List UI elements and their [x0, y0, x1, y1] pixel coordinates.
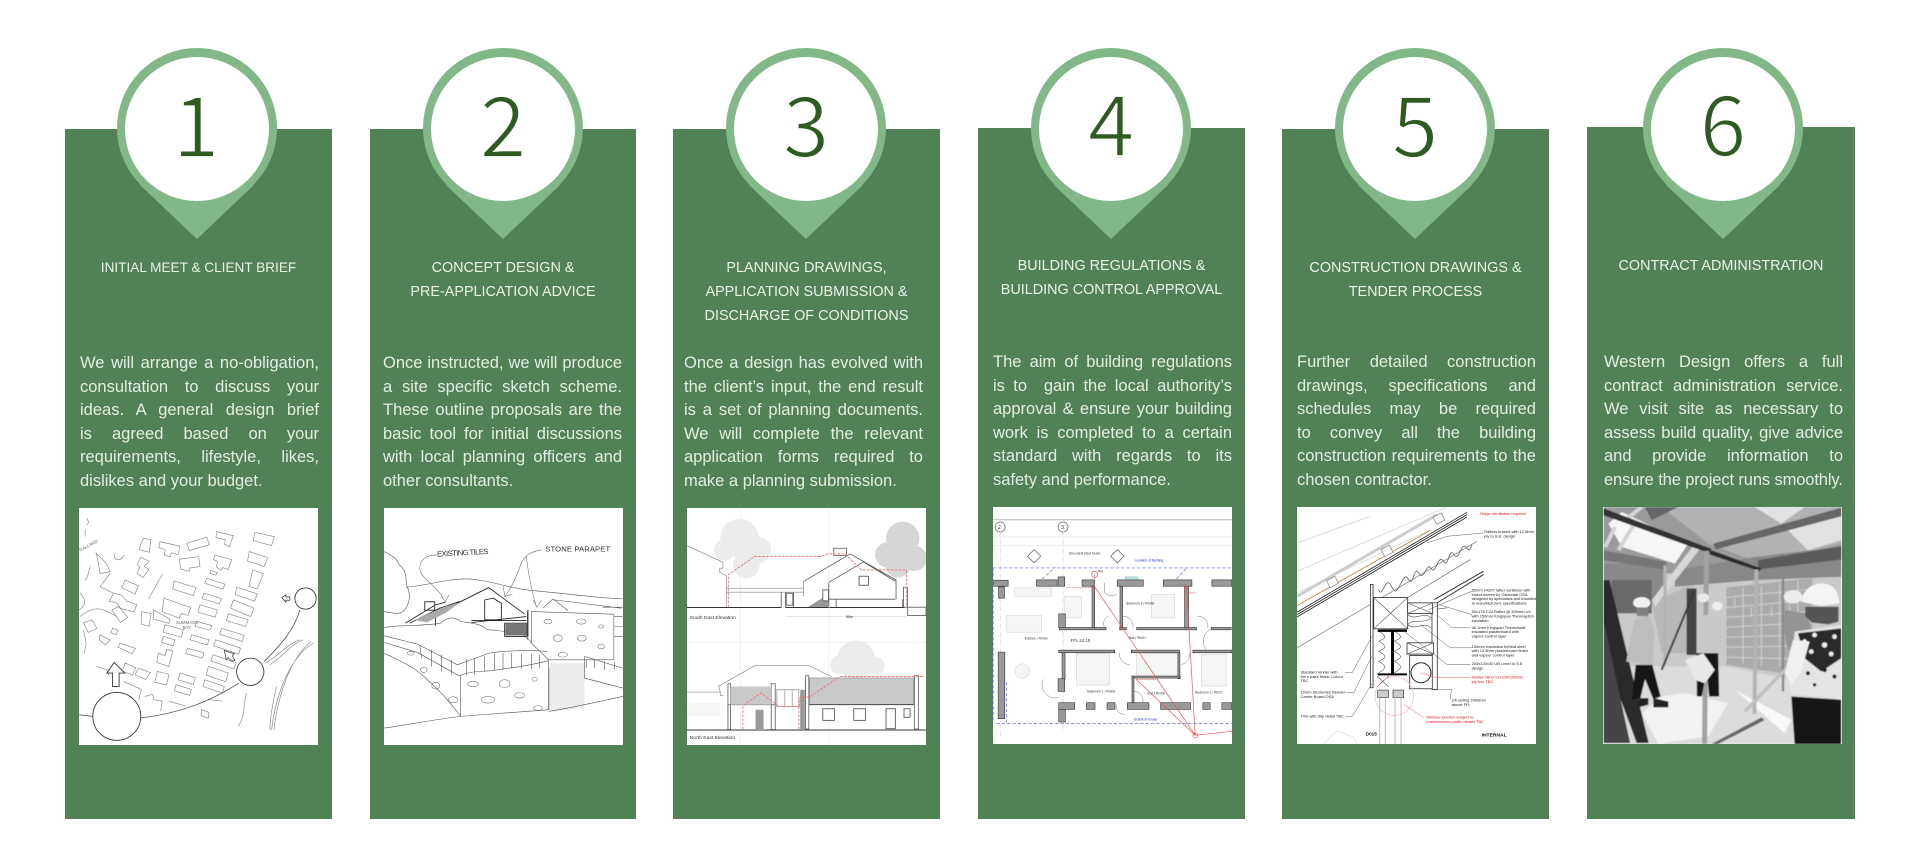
heading: CONTRACT ADMINISTRATION: [1619, 258, 1823, 274]
pin with number 6: [1643, 48, 1803, 239]
image: construction detail: insulated plasterboard with: [1472, 629, 1519, 634]
body text: is agreed based on your: [80, 424, 319, 442]
image: construction detail: design: [1472, 665, 1483, 670]
body text: with local planning officers and: [383, 448, 622, 466]
body text: drawings, specifications and: [1297, 376, 1536, 394]
image: construction detail: insect screen by Glidevale OSA: [1472, 592, 1528, 597]
body text: The aim of building regulations: [993, 353, 1232, 371]
image: planning elevations: 58m: [846, 615, 853, 619]
panel 4: building regulations: [978, 48, 1245, 819]
body text: a site specific sketch scheme.: [383, 378, 622, 396]
heading: CONSTRUCTION DRAWINGS &: [1309, 260, 1522, 276]
image: floor plan: 2: [998, 525, 1001, 531]
image: construction detail: Carrier Board OSA: [1300, 694, 1334, 699]
body text: Once a design has evolved with: [684, 354, 923, 372]
pin with number 2: 2: [480, 61, 526, 182]
body text: make a planning submission.: [684, 472, 897, 490]
person left: [1626, 615, 1654, 665]
image: construction detail: s/b ceiling 2400mm: [1452, 698, 1487, 703]
body text: [684, 354, 923, 490]
image: construction detail: with 150mm Kingspan Thermapitch: [1472, 614, 1534, 619]
image: planning elevations: South East Elevation: [690, 615, 736, 621]
image: construction detail: [1297, 507, 1536, 744]
image: site sketch plan: BAY: [183, 625, 191, 630]
image: floor plan: Location of flashing: [1135, 558, 1163, 562]
image: construction detail: D015: [1366, 732, 1377, 737]
body text: standard with regards to its: [993, 447, 1232, 465]
body text: requirements, lifestyle, likes,: [80, 448, 319, 466]
pin with number 2: [423, 48, 583, 239]
body text: approval & ensure your building: [993, 400, 1232, 418]
heading: [705, 260, 908, 324]
image: floor plan: Rm: [1098, 570, 1103, 574]
heading: TENDER PROCESS: [1349, 284, 1482, 300]
image: construction detail: ply to S.E. design: [1484, 534, 1515, 539]
image: construction detail: Hidden blind 12x100x150mm: [1472, 674, 1524, 679]
image: concept sketch: [384, 508, 623, 745]
image: construction detail: designed by specialists and installed: [1472, 596, 1536, 601]
image: floor plan: Ens / Rm08: [1147, 691, 1165, 695]
body text: and provide information to: [1604, 447, 1843, 465]
image: construction detail: 203x133x30 UB Lintel to S.E: [1472, 661, 1523, 666]
pin with number 4: 4: [1088, 60, 1134, 181]
pin with number 5: [1335, 48, 1495, 239]
image: floor plan: Bedroom 4 / Rm08: [1126, 602, 1154, 606]
image: floor plan: Bedroom 2 / Rm07: [1195, 690, 1223, 694]
body text: construction requirements to the: [1297, 447, 1536, 465]
heading: [1309, 260, 1522, 300]
body text: chosen contractor.: [1297, 470, 1432, 488]
body text: Further detailed construction: [1297, 353, 1536, 371]
body text: the client’s input, the end result: [684, 378, 923, 396]
body text: other consultants.: [383, 472, 513, 490]
panel 3: planning drawings: [673, 48, 940, 819]
heading: APPLICATION SUBMISSION &: [705, 284, 908, 300]
body text: assess build quality, give advice: [1604, 424, 1843, 442]
heading: BUILDING REGULATIONS &: [1018, 258, 1205, 274]
body text: Western Design offers a full: [1604, 353, 1843, 371]
pin with number 4: [1031, 48, 1191, 239]
body text: These outline proposals are the: [383, 401, 622, 419]
person right back: [1784, 610, 1811, 650]
image: construction detail: Standard render with: [1300, 669, 1337, 674]
body text: [993, 353, 1232, 488]
image: floor plan: 3: [1061, 525, 1064, 531]
image: floor plan: Kitchen / Rm03: [1025, 636, 1048, 640]
body text: [80, 354, 319, 490]
heading: PLANNING DRAWINGS,: [726, 260, 887, 276]
body text: ideas. A general design brief: [80, 401, 319, 419]
heading: DISCHARGE OF CONDITIONS: [705, 308, 908, 324]
image: floor plan: [993, 507, 1232, 744]
body text: [1604, 353, 1843, 488]
image: construction detail: above FFL: [1452, 702, 1471, 707]
panel 2: concept design: [370, 48, 636, 819]
image: construction detail: to manufacturers specifications: [1472, 601, 1527, 606]
heading: PRE-APPLICATION ADVICE: [410, 284, 596, 300]
body text: contract administration service.: [1604, 376, 1843, 394]
body text: work is completed to a certain: [993, 424, 1232, 442]
person centre: [1698, 612, 1721, 653]
image: construction detail: 50mm x420? rafter ventilator with: [1472, 588, 1530, 593]
image: planning elevations: [687, 508, 926, 745]
person right front: [1791, 696, 1841, 744]
pin with number 5: 5: [1392, 61, 1438, 182]
image: floor plan: Hall / Rm01: [1129, 636, 1146, 640]
body text: [383, 354, 622, 490]
image: construction detail: 100mm Insulation behind steel: [1472, 644, 1526, 649]
image: construction detail: Window junction subject to: [1426, 715, 1474, 720]
body text: consultation to discuss your: [80, 378, 319, 396]
image: construction detail: vapour control layer: [1472, 633, 1507, 638]
heading: INITIAL MEET & CLIENT BRIEF: [101, 260, 296, 275]
image: construction detail: 12mm StoVentec Render: [1300, 690, 1346, 695]
image: concept sketch: STONE PARAPET: [545, 545, 611, 554]
body text: We will arrange a no-obligation,: [80, 354, 319, 372]
body text: [1297, 353, 1536, 488]
body text: dislikes and your budget.: [80, 472, 263, 490]
panel 5: construction drawings: [1282, 48, 1549, 819]
image: site photo: [1603, 507, 1842, 744]
image: construction detail: TBC: [1300, 678, 1309, 683]
pin with number 3: [726, 48, 886, 239]
pin with number 1: 1: [173, 61, 219, 182]
panel 1: initial meet: [65, 48, 332, 819]
body text: is to gain the local authority’s: [993, 376, 1232, 394]
body text: schedules may be required: [1297, 400, 1536, 418]
body text: Once instructed, we will produce: [383, 354, 622, 372]
image: planning elevations: North East Elevation: [690, 735, 735, 741]
image: concept sketch: EXISTING TILES: [437, 547, 489, 559]
body text: safety and performance.: [993, 470, 1171, 488]
heading: [1001, 258, 1222, 298]
image: construction detail: INTERNAL: [1482, 732, 1507, 738]
image: construction detail: and vapour control layer: [1472, 652, 1515, 657]
body text: is a set of planning documents.: [684, 401, 923, 419]
heading: BUILDING CONTROL APPROVAL: [1001, 282, 1222, 298]
body text: basic tool for initial discussions: [383, 424, 622, 442]
body text: ensure the project runs smoothly.: [1604, 470, 1843, 488]
image: construction detail: 40.1mm Kingspan Thermawall: [1472, 625, 1525, 630]
image: construction detail: insulation: [1472, 618, 1488, 623]
image: floor plan: Structural steel beam: [1069, 552, 1101, 556]
image: construction detail: Ridge Ventilation required: [1480, 511, 1526, 516]
body text: application forms required to: [684, 448, 923, 466]
body text: We will complete the relevant: [684, 424, 923, 442]
image: construction detail: manufactures profile details TBC: [1426, 719, 1484, 724]
image: construction detail: ply box TBC: [1472, 679, 1493, 684]
pin with number 1: [117, 48, 277, 239]
image: construction detail: with 12.5mm plasterboard finish: [1472, 648, 1528, 653]
image: site sketch plan: [79, 508, 318, 745]
image: construction detail: Trim with drip detail TBC: [1300, 713, 1344, 718]
pin with number 3: 3: [783, 61, 829, 182]
heading: [410, 260, 596, 300]
body text: We visit site as necessary to: [1604, 400, 1843, 418]
image: floor plan: FFL 24.15: [1071, 638, 1091, 643]
image: construction detail: 50x175 C24 Rafter @ 300mm c/c: [1472, 609, 1531, 614]
image: construction detail: Kern paint finish. Colour: [1300, 674, 1344, 679]
panel 6: contract administration: [1587, 48, 1855, 819]
body text: to convey all the building: [1297, 424, 1536, 442]
image: floor plan: Bedroom 1 / Rm06: [1087, 690, 1115, 694]
pin with number 6: 6: [1700, 60, 1746, 181]
image: floor plan: Extent of render: [1134, 718, 1158, 722]
image: construction detail: Rafters braced with 12.5mm: [1484, 529, 1535, 534]
heading: CONCEPT DESIGN &: [432, 260, 574, 276]
image: site sketch plan: SUMMAGE: [176, 620, 198, 625]
